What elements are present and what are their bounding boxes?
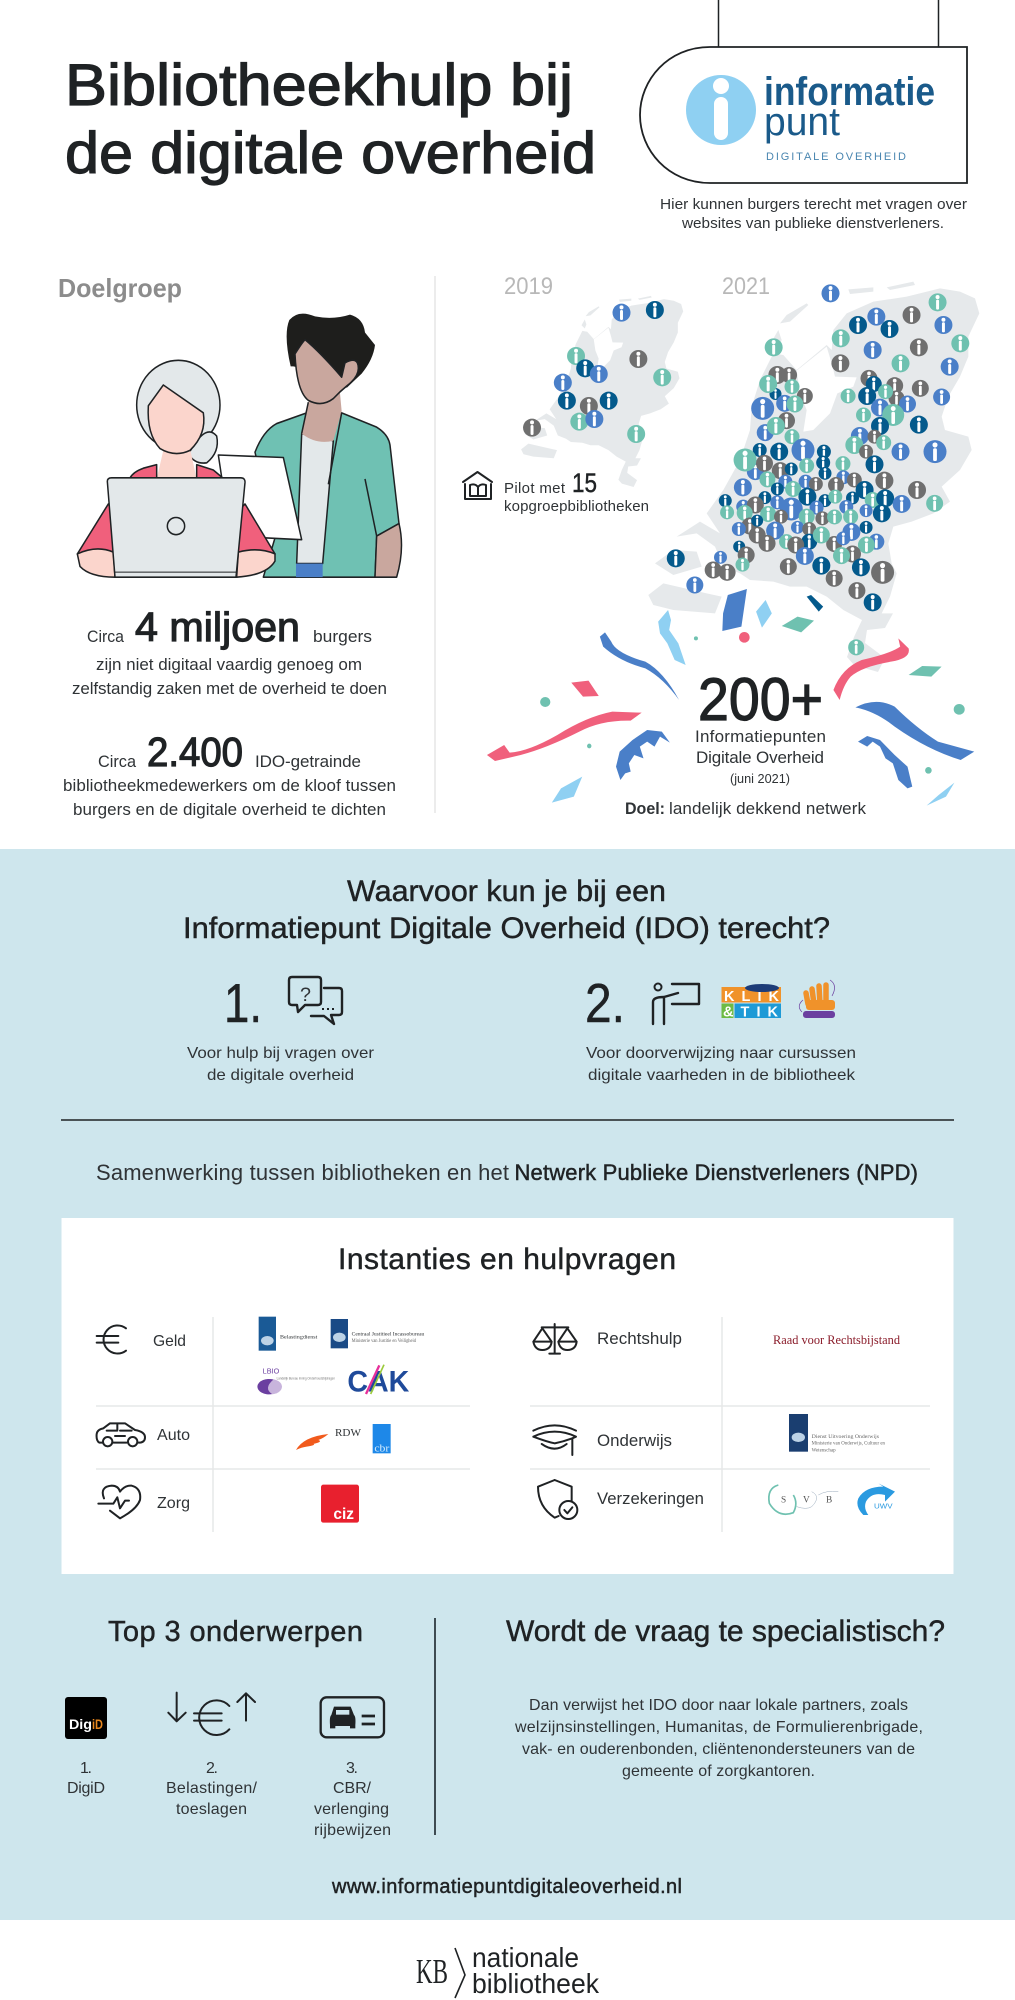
logos: geld: CAK (347, 1365, 410, 1398)
topic 2: belastingen (166, 1693, 258, 1818)
icon: presenter (653, 984, 699, 1024)
pilot note: Pilot met (504, 480, 566, 497)
logos: auto: cbr (374, 1444, 390, 1455)
icon: scales (533, 1324, 577, 1354)
row: auto: Auto (157, 1427, 190, 1444)
text block: 4 miljoen: Circa (87, 627, 125, 646)
text: samenwerking: Samenwerking tussen bibliotheken en het (96, 1160, 509, 1185)
pilot note: 15 (572, 468, 597, 498)
item 1: hulp bij vragen: Voor hulp bij vragen over (187, 1045, 375, 1062)
map: netherlands 2021 (648, 282, 979, 672)
heading: waarvoor: Waarvoor kun je bij een (347, 875, 666, 908)
heading: waarvoor (183, 875, 830, 945)
logo caption (660, 196, 967, 232)
title (65, 53, 596, 186)
logo sign: informatiepunt: informatie (764, 70, 935, 114)
text block: 4 miljoen: 4 miljoen (135, 604, 300, 650)
icon: information circle (686, 75, 756, 145)
topic 2: belastingen: Belastingen/ (166, 1780, 258, 1797)
confetti (487, 589, 974, 806)
pilot note: kopgroepbibliotheken (504, 498, 649, 515)
logo: duo: Ministerie van Onderwijs, Cultuur en (812, 1442, 885, 1447)
logos: geld (257, 1317, 425, 1398)
row: geld (97, 1317, 425, 1398)
row: zorg: Zorg (157, 1495, 190, 1512)
text: samenwerking: Netwerk Publieke Dienstverleners (NPD) (514, 1160, 918, 1185)
item 1: hulp bij vragen (187, 972, 375, 1084)
logo: duo (789, 1414, 885, 1453)
text block: doorverwijzing: welzijnsinstellingen, Humanitas, de Formulierenbrigade, (514, 1719, 923, 1736)
icon: speech bubbles (289, 977, 342, 1024)
logos: geld: Belastingdienst (280, 1335, 318, 1341)
stat: 200+ informatiepunten (625, 666, 866, 818)
stat: 200+ informatiepunten: Digitale Overheid (696, 748, 824, 767)
row: rechtshulp (533, 1324, 900, 1354)
text block: doorverwijzing: gemeente of zorgkantoren. (622, 1763, 815, 1780)
item 2: doorverwijzing: 2. (585, 972, 625, 1034)
logos: geld: Ministerie van Justitie en Veiligheid (352, 1339, 416, 1344)
year label 2019: 2019 (504, 273, 553, 300)
text block: 2.400: bibliotheekmedewerkers om de kloof tussen (63, 776, 396, 795)
icon: euro (97, 1325, 126, 1353)
topic 3: cbr: CBR/ (333, 1780, 372, 1797)
logo sign: informatiepunt (640, 0, 967, 183)
logo: klik en tik: KLIK (724, 989, 780, 1005)
logo: kb nationale bibliotheek: KB (416, 1952, 448, 1991)
logo: raad voor rechtsbijstand: Raad voor Rechtsbijstand (773, 1332, 900, 1347)
logo sign: informatiepunt: DIGITALE OVERHEID (766, 151, 906, 163)
text block: 2.400: Circa (98, 752, 137, 771)
logo sign: informatiepunt: punt (764, 100, 840, 144)
text: samenwerking (96, 1160, 918, 1185)
logos: svb and uwv: UWV (874, 1502, 893, 1511)
topic 1: digid: Dig (69, 1717, 92, 1732)
logo: klik en tik: &TIK (723, 1004, 779, 1020)
title: Bibliotheekhulp bij (65, 53, 573, 118)
text block: doorverwijzing: vak- en ouderenbonden, cliëntenondersteuners van de (522, 1741, 915, 1758)
topic 1: digid: iD (92, 1717, 103, 1732)
logos: auto (296, 1424, 391, 1455)
row: geld: Geld (153, 1333, 186, 1350)
text block: 4 miljoen: zelfstandig zaken met de overheid te doen (72, 679, 387, 698)
topic 1: digid: DigiD (67, 1780, 105, 1797)
topic 1: digid: 1. (80, 1760, 92, 1777)
stat: 200+ informatiepunten: Informatiepunten (695, 727, 826, 746)
logos: svb and uwv: S (781, 1496, 786, 1506)
row: auto (97, 1423, 391, 1455)
item 2: doorverwijzing (585, 972, 856, 1084)
logos: auto: RDW (335, 1428, 361, 1439)
icon: heart (98, 1486, 140, 1518)
logo: ciz: ciz (333, 1506, 354, 1523)
panel: te specialistisch: Wordt de vraag te specialistisch? (506, 1615, 945, 1648)
row: onderwijs: Onderwijs (597, 1432, 672, 1450)
item 2: doorverwijzing: digitale vaarheden in de bibliotheek (588, 1067, 856, 1084)
logo: klik en tik (722, 984, 781, 1020)
pilot note (463, 468, 649, 515)
icon: speech bubbles: ? (300, 985, 311, 1006)
panel: te specialistisch (506, 1615, 945, 1780)
topic 3: cbr (314, 1697, 391, 1839)
item 2: doorverwijzing: Voor doorverwijzing naar cursussen (586, 1045, 856, 1062)
logo: kb nationale bibliotheek: nationale (472, 1942, 579, 1973)
markers 2019 (523, 301, 671, 443)
section background: blue (0, 849, 1015, 1920)
panel: doelgroep (58, 273, 402, 819)
logos: svb and uwv: V (803, 1496, 810, 1506)
row: verzekeringen: Verzekeringen (597, 1490, 704, 1508)
row: verzekeringen (538, 1480, 895, 1519)
text block: doorverwijzing (514, 1697, 923, 1780)
logos: geld: Centraal Justitieel Incassobureau (352, 1333, 425, 1338)
topic 2: belastingen: toeslagen (176, 1801, 247, 1818)
text block: 4 miljoen: burgers (313, 627, 372, 646)
logo caption: Hier kunnen burgers terecht met vragen over (660, 196, 967, 213)
logo: kb nationale bibliotheek: bibliotheek (472, 1968, 600, 1999)
logo: duo: Wetenschap (812, 1448, 836, 1453)
icon: graduation cap (533, 1425, 576, 1455)
year label 2021: 2021 (722, 273, 770, 300)
topic 3: cbr: 3. (346, 1760, 358, 1777)
logo: digisterker (799, 980, 835, 1018)
heading: instanties: Instanties en hulpvragen (338, 1243, 676, 1276)
row: onderwijs (533, 1414, 885, 1455)
logo: ciz (321, 1485, 359, 1523)
panel: map 2021 (487, 273, 979, 818)
heading: doelgroep: Doelgroep (58, 273, 182, 303)
item 1: hulp bij vragen: 1. (224, 972, 262, 1034)
item 1: hulp bij vragen: de digitale overheid (207, 1067, 354, 1084)
logos: geld: LBIO (263, 1369, 280, 1376)
panel: instanties en hulpvragen (62, 1218, 954, 1574)
stat: 200+ informatiepunten: (juni 2021) (730, 771, 790, 786)
heading: waarvoor: Informatiepunt Digitale Overheid (IDO) terecht? (183, 912, 830, 945)
text block: 2.400: IDO-getrainde (255, 752, 361, 771)
logos: svb and uwv: B (826, 1496, 832, 1506)
markers 2021 (667, 284, 969, 655)
topic 1: digid (65, 1697, 107, 1797)
topic 3: cbr: rijbewijzen (314, 1822, 391, 1839)
logo caption: websites van publieke dienstverleners. (681, 215, 944, 232)
text block: 2.400: burgers en de digitale overheid te dichten (73, 800, 386, 819)
stat: 200+ informatiepunten: landelijk dekkend netwerk (669, 799, 866, 818)
text block: 4 miljoen: zijn niet digitaal vaardig genoeg om (96, 655, 362, 674)
title: de digitale overheid (65, 121, 596, 186)
website url: www.informatiepuntdigitaleoverheid.nl (331, 1876, 682, 1898)
logo: kb nationale bibliotheek (416, 1942, 600, 1999)
icon: shield (538, 1480, 577, 1519)
logos: svb and uwv (769, 1483, 895, 1515)
panel: map 2019 (463, 273, 683, 515)
logo: duo: Dienst Uitvoering Onderwijs (812, 1435, 879, 1440)
illustration: two people with laptop (77, 314, 402, 577)
panel: top 3 onderwerpen (65, 1616, 391, 1839)
topic 2: belastingen: 2. (206, 1760, 218, 1777)
text block: 4 miljoen (72, 604, 387, 698)
heading: top 3: Top 3 onderwerpen (108, 1616, 363, 1648)
text block: 2.400 (63, 729, 396, 819)
text block: doorverwijzing: Dan verwijst het IDO door naar lokale partners, zoals (529, 1697, 908, 1714)
stat: 200+ informatiepunten: 200+ (698, 666, 823, 733)
row: rechtshulp: Rechtshulp (597, 1330, 682, 1348)
logos: geld: Landelijk Bureau Inning Onderhoudsbijdragen (277, 1376, 335, 1380)
map: netherlands 2019 (521, 296, 683, 487)
topic 3: cbr: verlenging (314, 1801, 389, 1818)
row: zorg (98, 1485, 359, 1523)
icon: library house (463, 472, 492, 499)
text block: 2.400: 2.400 (147, 729, 243, 775)
icon: car (97, 1423, 145, 1446)
stat: 200+ informatiepunten: Doel: (625, 799, 665, 818)
